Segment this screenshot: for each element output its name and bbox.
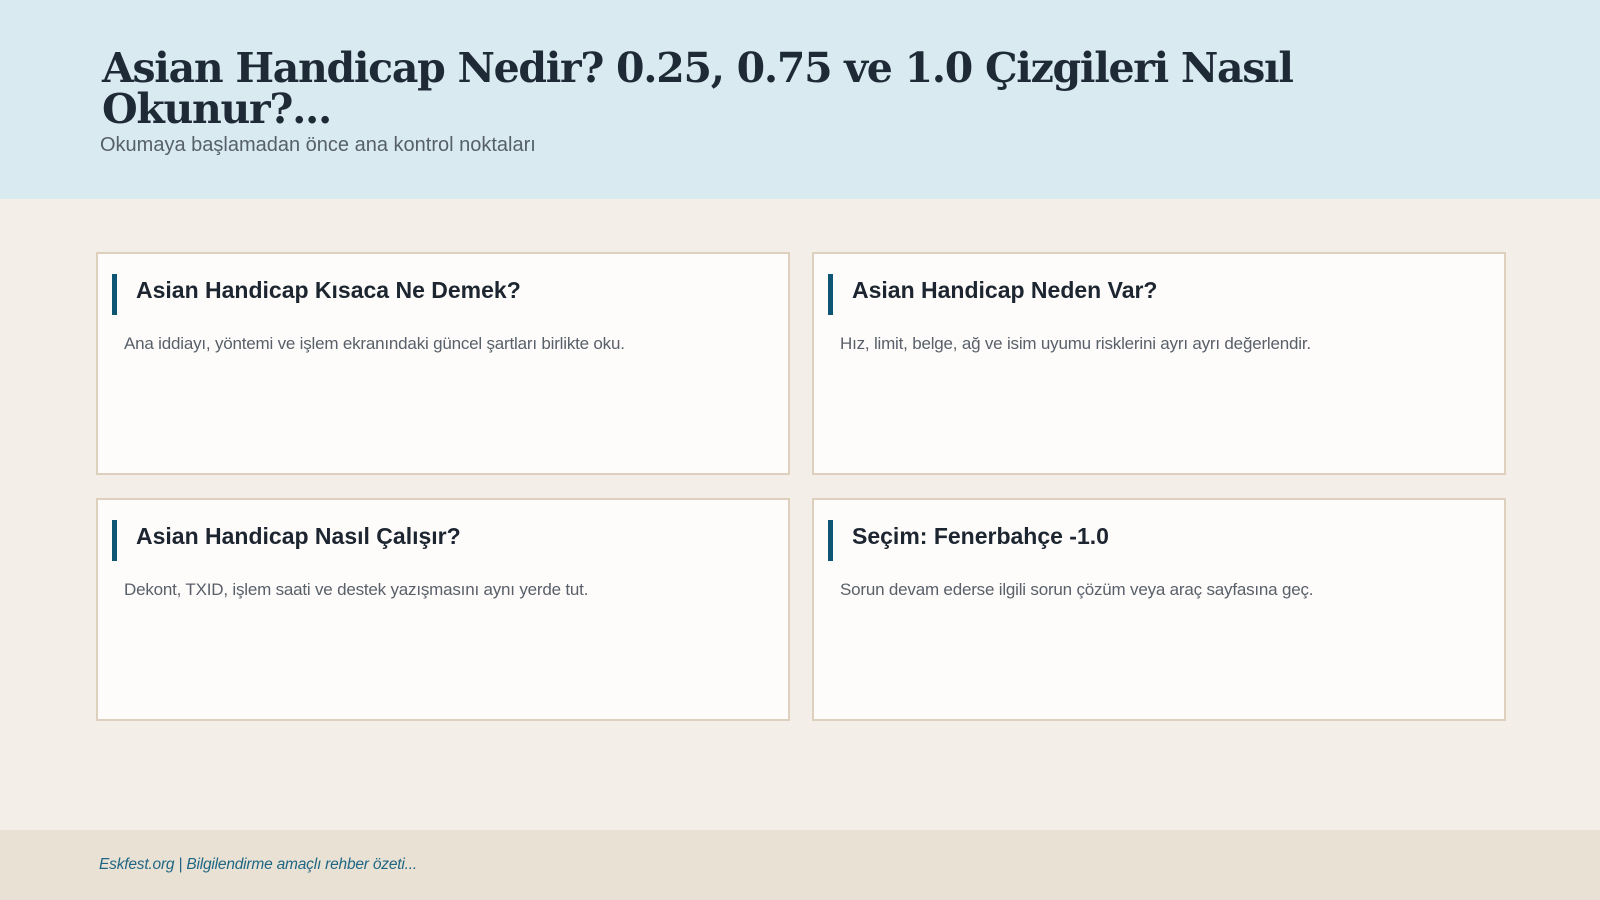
text: Hız, limit, belge, ağ ve isim uyumu risklerini ayrı ayrı değerlendir. bbox=[840, 334, 1311, 353]
header bbox=[0, 0, 1600, 199]
accent bar bbox=[828, 520, 833, 561]
text: Dekont, TXID, işlem saati ve destek yazışmasını aynı yerde tut. bbox=[124, 580, 588, 599]
footer bbox=[0, 830, 1600, 900]
text: Sorun devam ederse ilgili sorun çözüm veya araç sayfasına geç. bbox=[840, 580, 1313, 599]
subtitle: Okumaya başlamadan önce ana kontrol noktaları bbox=[100, 134, 536, 156]
heading: Asian Handicap Nasıl Çalışır? bbox=[136, 523, 461, 549]
panel: neden bbox=[812, 252, 1506, 475]
heading: Seçim: Fenerbahçe -1.0 bbox=[852, 523, 1109, 549]
accent bar bbox=[112, 274, 117, 315]
text: Ana iddiayı, yöntemi ve işlem ekranındaki güncel şartları birlikte oku. bbox=[124, 334, 625, 353]
heading: Asian Handicap Kısaca Ne Demek? bbox=[136, 277, 521, 303]
panel: secim bbox=[812, 498, 1506, 721]
accent bar bbox=[828, 274, 833, 315]
footer text: Eskfest.org | Bilgilendirme amaçlı rehber özeti... bbox=[99, 856, 417, 873]
panel: kisaca bbox=[96, 252, 790, 475]
accent bar bbox=[112, 520, 117, 561]
heading: Asian Handicap Neden Var? bbox=[852, 277, 1157, 303]
title: Asian Handicap Nedir? 0.25, 0.75 ve 1.0 Çizgileri Nasıl Okunur?... bbox=[102, 44, 1293, 133]
panel: nasil bbox=[96, 498, 790, 721]
